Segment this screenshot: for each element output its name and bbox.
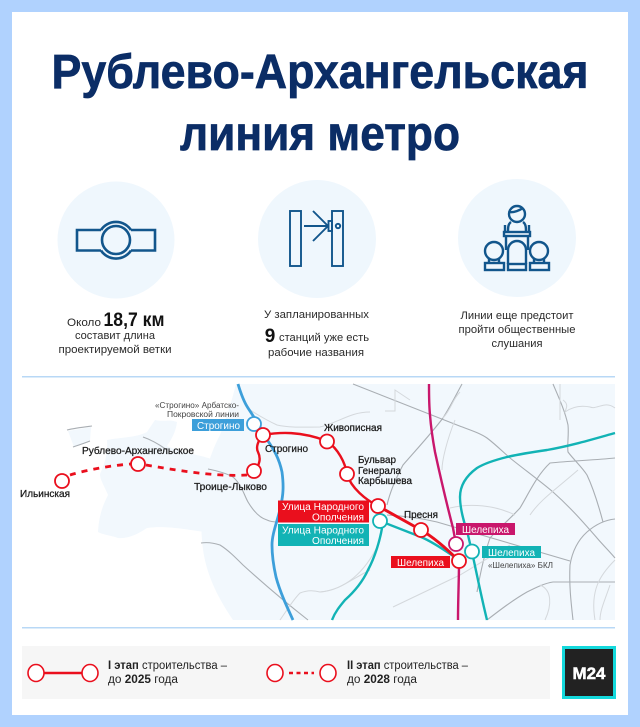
- text: stations: 9: [265, 326, 275, 347]
- label: Shelepikha red: [391, 556, 450, 569]
- label: Narodnogo Opolcheniya red: [278, 500, 369, 524]
- label: Narodnogo Opolcheniya red: Улица Народного: [282, 502, 364, 513]
- legend: [22, 646, 550, 699]
- title: [52, 46, 588, 161]
- label: Strogino blue: Строгино: [197, 421, 240, 432]
- title: Рублево-Архангельская: [52, 46, 588, 99]
- line: red thick: [378, 506, 459, 561]
- icon: tunnel station: [58, 182, 174, 298]
- legend: stage 2 text: [347, 660, 469, 686]
- label: Narodnogo Opolcheniya teal: Ополчения: [312, 536, 364, 547]
- text: length: проектируемой ветки: [58, 344, 172, 356]
- roads: [67, 384, 615, 620]
- map background: [68, 384, 615, 620]
- panel: stations fact: [258, 180, 376, 359]
- station labels: Пресня: [404, 510, 438, 521]
- label: Shelepikha magenta: [456, 523, 515, 536]
- stations: [55, 417, 479, 568]
- line: teal branch: [332, 521, 456, 620]
- station labels: Ильинская: [20, 489, 70, 500]
- text: length: Около: [67, 317, 101, 329]
- text: hearings: пройти общественные: [458, 324, 576, 336]
- legend: stage 2 symbol: [267, 664, 336, 682]
- station labels: Бульвар: [358, 455, 396, 466]
- transfer note: Strogino: [155, 401, 239, 419]
- station labels: Строгино: [265, 444, 308, 455]
- map: [20, 384, 615, 620]
- label: Narodnogo Opolcheniya red: Ополчения: [312, 512, 364, 524]
- label: Shelepikha magenta: Шелепиха: [462, 525, 509, 536]
- logo: M24: M24: [572, 664, 606, 683]
- station labels: Троице-Лыково: [194, 482, 267, 493]
- transfer note: Shelepikha: «Шелепиха» БКЛ: [488, 561, 553, 570]
- station labels: Живописная: [324, 423, 382, 434]
- text: stations: рабочие названия: [268, 347, 364, 359]
- panel: hearings fact: [458, 179, 576, 350]
- title: линия метро: [180, 108, 460, 161]
- legend: stage 2 text: II этап строительства –: [347, 660, 469, 672]
- text: length: составит длина: [75, 330, 156, 342]
- line: red solid: [254, 433, 378, 506]
- transfer note: Strogino: «Строгино» Арбатско-: [155, 401, 239, 410]
- text: hearings: слушания: [492, 338, 543, 350]
- transfer note: Strogino: Покровской линии: [167, 410, 239, 419]
- label: Shelepikha red: Шелепиха: [397, 558, 444, 569]
- icon: public hearing: [458, 179, 576, 297]
- legend: stage 1 text: до 2025 года: [108, 674, 179, 686]
- label: Narodnogo Opolcheniya teal: Улица Народного: [282, 526, 364, 536]
- text: stations: станций уже есть: [279, 332, 369, 344]
- text: length: 18,7 км: [104, 310, 164, 331]
- line: magenta: [429, 384, 459, 620]
- text: stations: У запланированных: [264, 309, 370, 321]
- logo: M24: [564, 648, 614, 698]
- station labels: Генерала: [358, 466, 401, 477]
- text: hearings: [458, 310, 576, 350]
- station labels: Карбышева: [358, 475, 412, 487]
- minor roads: [247, 384, 615, 620]
- legend: stage 1 symbol: [28, 664, 98, 682]
- label: Shelepikha teal: Шелепиха: [488, 548, 535, 559]
- legend: stage 2 text: до 2028 года: [347, 674, 418, 686]
- text: length: [58, 310, 172, 356]
- label: Narodnogo Opolcheniya teal: [278, 524, 369, 547]
- icon: turnstile: [258, 180, 376, 298]
- text: hearings: Линии еще предстоит: [460, 310, 574, 322]
- legend: stage 1 text: [108, 660, 228, 686]
- label: Shelepikha teal: [482, 546, 541, 559]
- legend: stage 1 text: I этап строительства –: [108, 660, 228, 672]
- panel: length fact: [58, 182, 174, 356]
- line: Arbatsko-Pokrovskaya: [238, 384, 293, 620]
- line: teal ring: [460, 433, 615, 620]
- line: red dashed: [70, 464, 247, 475]
- station labels: [20, 423, 438, 521]
- station labels: Рублево-Архангельское: [82, 445, 194, 457]
- text: stations: [264, 309, 370, 359]
